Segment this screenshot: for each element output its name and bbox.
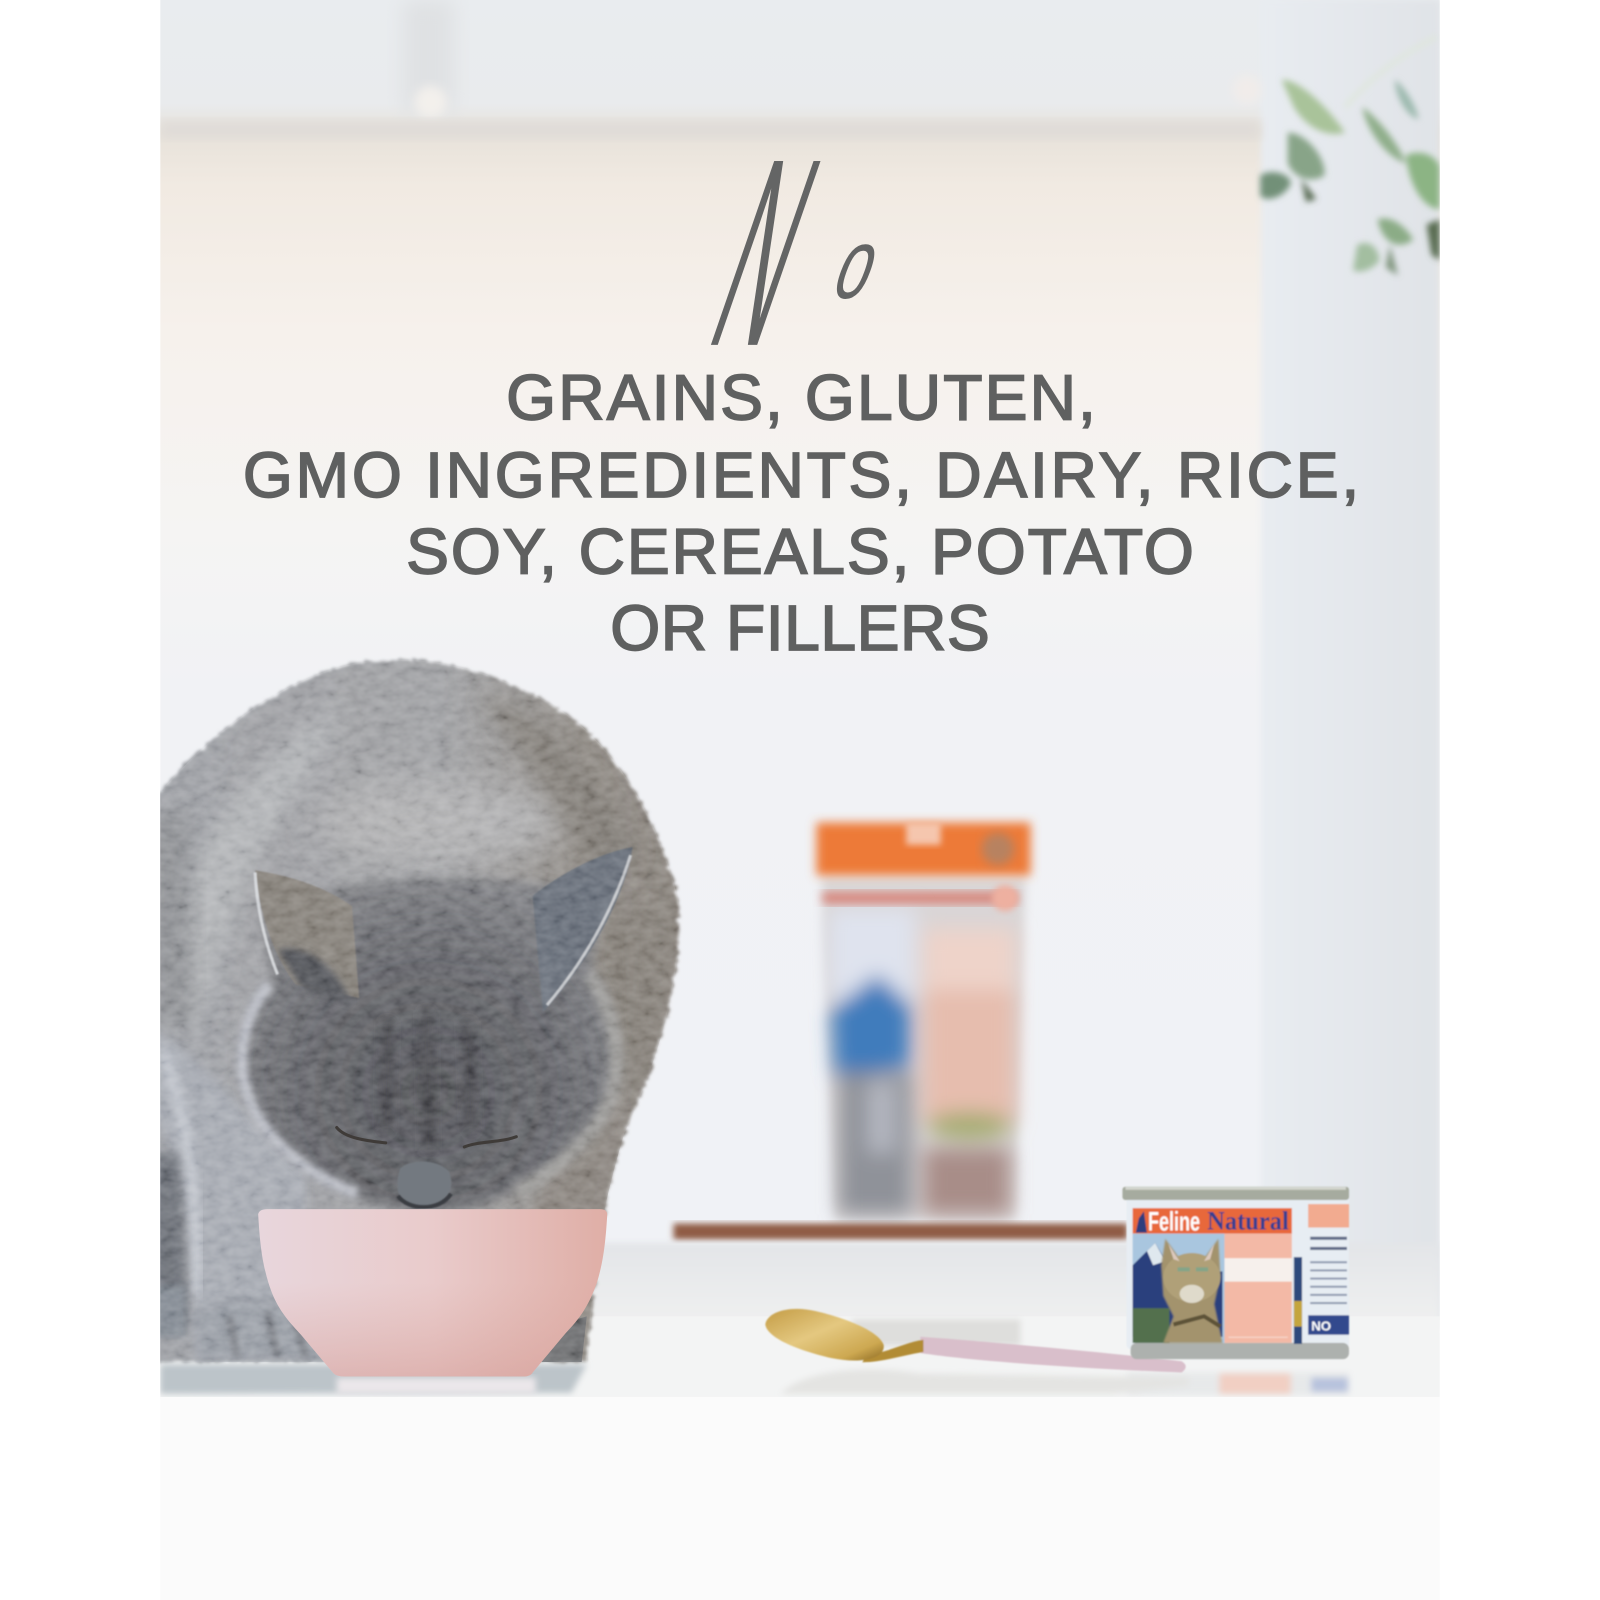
can side text (1308, 1204, 1349, 1304)
brand name (1148, 1210, 1289, 1232)
counter front (160, 1397, 1356, 1400)
can reflection (1128, 1372, 1349, 1395)
spoon reflection (786, 1369, 1133, 1394)
brand name: Feline (1148, 1207, 1200, 1237)
can side strip (1294, 1257, 1302, 1344)
script word: No: o (821, 208, 896, 320)
cat nose (397, 1161, 451, 1209)
can banner (1133, 1208, 1292, 1234)
headline: OR FILLERS (610, 592, 990, 664)
headline: SOY, CEREALS, POTATO (406, 515, 1194, 587)
gold spoon (765, 1309, 1186, 1372)
table surface (160, 1243, 1440, 1400)
cat food can (1122, 1187, 1349, 1359)
plant leaves (1256, 76, 1440, 277)
can peach panel (1224, 1234, 1292, 1343)
script word: No: N (684, 104, 847, 403)
cat ears (255, 847, 633, 1012)
infographic photo panel (160, 0, 1440, 1397)
blurred wooden shelf (673, 1223, 1128, 1240)
cat fur shading (153, 694, 663, 1362)
pink bowl (258, 1209, 607, 1377)
cat head (239, 847, 633, 1212)
can banner cat silhouette (1136, 1211, 1147, 1233)
cat (153, 653, 691, 1367)
headline (243, 361, 1359, 664)
can photo (1133, 1234, 1224, 1343)
can body (1127, 1196, 1349, 1349)
headline: GRAINS, GLUTEN, (506, 361, 1096, 433)
background: room wall (160, 0, 1440, 1327)
bowl reflection on table (160, 1364, 587, 1394)
cat body (153, 660, 679, 1362)
cat fur texture (160, 653, 691, 1367)
can NO badge: NO (1311, 1319, 1331, 1334)
cat eyes (337, 1128, 516, 1147)
can photo cat (1161, 1239, 1222, 1343)
can lid (1122, 1187, 1349, 1200)
brand name: Natural (1207, 1206, 1289, 1236)
script word: No (710, 161, 874, 345)
blurred product bag (816, 822, 1031, 1219)
headline: GMO INGREDIENTS, DAIRY, RICE, (243, 439, 1359, 511)
can NO badge (1308, 1315, 1349, 1335)
